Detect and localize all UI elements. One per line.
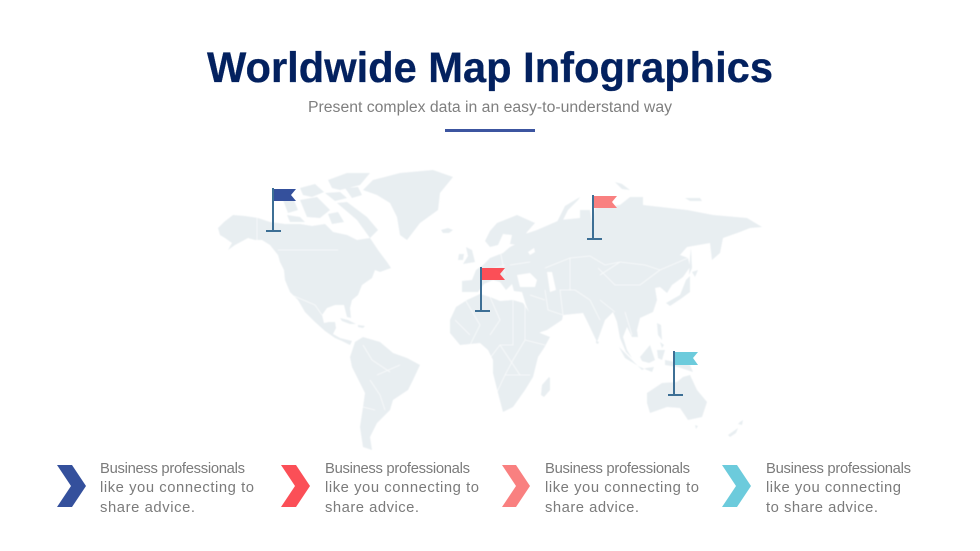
Eurasia: [462, 197, 762, 358]
item 4: [722, 461, 911, 516]
text: item 2: share advice.: [325, 500, 419, 516]
Arctic Russia islands: [615, 182, 702, 201]
title underline: [445, 129, 535, 132]
Philippines: [657, 323, 664, 348]
text: item 2: like you connecting to: [325, 480, 479, 496]
item 1: [57, 461, 254, 516]
text: item 3: Business professionals: [545, 461, 690, 477]
Iceland: [441, 228, 453, 233]
title: Worldwide Map Infographics: [207, 44, 773, 92]
Sri Lanka: [596, 341, 599, 344]
text: item 2: Business professionals: [325, 461, 470, 477]
Sakhalin: [689, 248, 692, 275]
subtitle: Present complex data in an easy-to-understand way: [308, 99, 672, 116]
text: item 1: like you connecting to: [100, 480, 254, 496]
country borders: [257, 218, 688, 410]
Africa: [450, 294, 550, 412]
item 2: [281, 461, 479, 516]
item 3: [502, 461, 699, 516]
Novaya Zemlya: [556, 197, 580, 224]
world map: [218, 170, 762, 450]
text: item 4: Business professionals: [766, 461, 911, 477]
text: item 3: like you connecting to: [545, 480, 699, 496]
Japan: [666, 270, 698, 306]
icon: red chevron: [281, 465, 310, 507]
United Kingdom and Ireland: [458, 247, 475, 264]
text: item 3: share advice.: [545, 500, 639, 516]
text: item 4: to share advice.: [766, 500, 878, 516]
flag: blue, North America: [266, 188, 296, 232]
flag: pink, Russia: [587, 195, 617, 240]
Tasmania: [695, 425, 698, 429]
Arctic islands: [283, 173, 378, 238]
Indonesia: [619, 345, 693, 372]
Greenland: [363, 170, 453, 240]
North America: [218, 215, 391, 345]
New Zealand: [728, 420, 743, 437]
inland seas: [517, 248, 556, 292]
icon: pink chevron: [502, 465, 530, 507]
Scandinavia: [485, 215, 535, 247]
South America: [350, 337, 420, 450]
flag: red, Europe: [475, 267, 505, 312]
text: item 1: share advice.: [100, 500, 195, 516]
Madagascar: [541, 377, 550, 397]
flag: teal, Australia: [668, 351, 698, 396]
icon: blue chevron: [57, 465, 86, 507]
text: item 4: like you connecting: [766, 480, 901, 496]
Cuba and Caribbean: [340, 318, 365, 328]
text: item 1: Business professionals: [100, 461, 245, 477]
Australia: [647, 375, 707, 420]
icon: teal chevron: [722, 465, 751, 507]
